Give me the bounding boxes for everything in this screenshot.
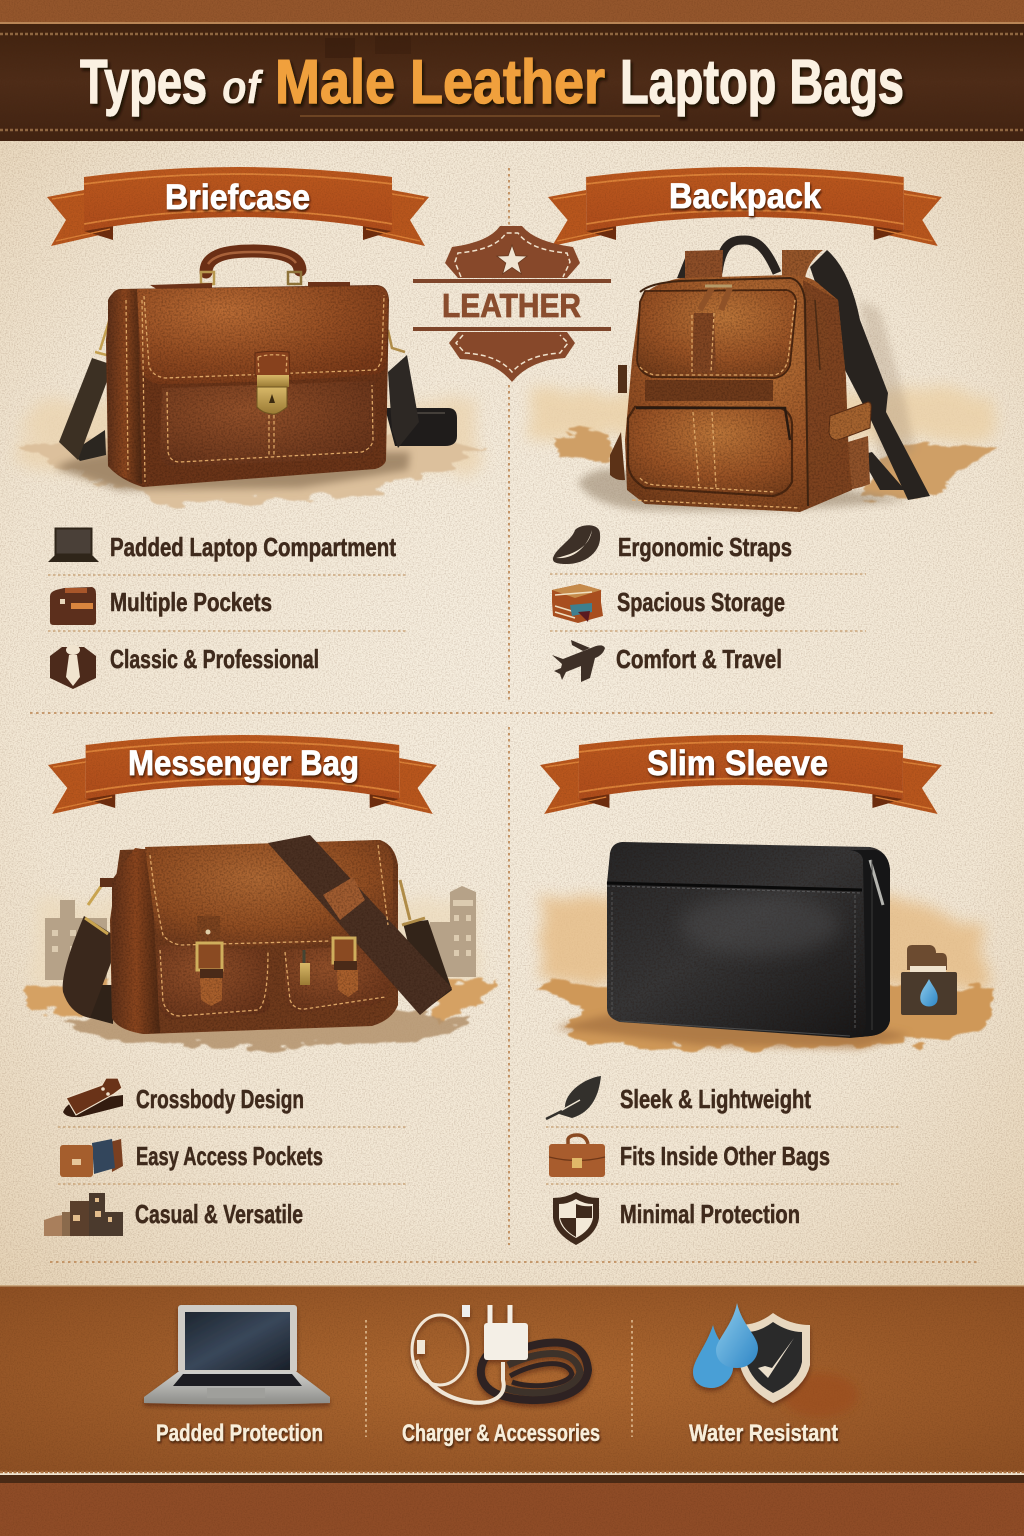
- icon: shield: [553, 1192, 599, 1245]
- messenger feature list: [44, 1078, 406, 1236]
- paper background: [0, 140, 1024, 1286]
- panel: backpack: [525, 167, 995, 682]
- title text: of: [222, 61, 264, 113]
- icon: laptop: [48, 528, 99, 562]
- top leather band: [0, 0, 1024, 24]
- section dividers: [30, 168, 995, 1262]
- icon: shirt and tie: [50, 645, 96, 689]
- charger and cables illustration: [412, 1305, 588, 1403]
- messenger ribbon heading: [48, 735, 437, 814]
- icon: crossbody strap: [63, 1078, 123, 1117]
- water drops and shield illustration: [693, 1303, 810, 1403]
- briefcase feature list: Multiple Pockets: [110, 587, 272, 617]
- icon: easy access pockets: [60, 1139, 123, 1177]
- slim sleeve feature list: [546, 1076, 900, 1245]
- messenger background wash: [22, 886, 495, 1048]
- footer labels: Padded Protection: [156, 1420, 323, 1447]
- leather badge: [413, 226, 611, 382]
- messenger feature list: Crossbody Design: [136, 1084, 304, 1114]
- messenger feature list: Casual & Versatile: [135, 1199, 303, 1229]
- briefcase ribbon heading: Briefcase: [165, 178, 310, 217]
- briefcase background wash: [20, 400, 490, 505]
- icon: airplane: [552, 640, 605, 682]
- messenger bag illustration: [63, 835, 452, 1034]
- backpack background wash: [525, 300, 995, 511]
- panel: messenger bag: [22, 735, 495, 1236]
- backpack feature list: [550, 525, 866, 682]
- backpack feature list: Spacious Storage: [617, 587, 785, 617]
- panel: slim sleeve: [532, 735, 995, 1245]
- icon: water folder: [901, 945, 957, 1015]
- briefcase feature list: [48, 528, 406, 689]
- footer labels: Water Resistant: [689, 1420, 838, 1447]
- briefcase feature list: Padded Laptop Compartment: [110, 532, 396, 562]
- backpack feature list: Comfort & Travel: [616, 644, 782, 674]
- icon: small briefcase: [549, 1135, 605, 1177]
- backpack feature list: Ergonomic Straps: [618, 532, 792, 562]
- panel: briefcase: [20, 167, 490, 689]
- backpack illustration: [610, 240, 930, 512]
- backpack ribbon heading: [548, 167, 942, 246]
- title text: Types: [80, 48, 207, 117]
- slim sleeve illustration: [607, 842, 890, 1038]
- backpack ribbon heading: Backpack: [669, 177, 821, 216]
- leather badge: LEATHER: [442, 287, 581, 324]
- icon: ergonomic strap: [553, 525, 600, 564]
- slim sleeve ribbon heading: [540, 735, 942, 814]
- badge star: [497, 245, 527, 274]
- laptop illustration: [144, 1305, 330, 1404]
- briefcase feature list: Classic & Professional: [110, 644, 319, 674]
- icon: feather: [546, 1076, 601, 1119]
- footer labels: [156, 1420, 838, 1447]
- title text: Laptop Bags: [620, 48, 904, 117]
- icon: spacious storage: [552, 584, 603, 623]
- footer labels: Charger & Accessories: [402, 1420, 600, 1447]
- messenger ribbon heading: Messenger Bag: [128, 744, 359, 783]
- bottom leather band: [0, 1475, 1024, 1536]
- icon: multiple pockets: [50, 587, 96, 625]
- city silhouette: [45, 886, 476, 980]
- slim sleeve feature list: Minimal Protection: [620, 1199, 800, 1229]
- slim sleeve ribbon heading: Slim Sleeve: [647, 744, 828, 783]
- briefcase ribbon heading: [47, 167, 429, 246]
- slim sleeve background wash: [532, 895, 995, 1050]
- messenger feature list: Easy Access Pockets: [136, 1141, 323, 1171]
- title banner: [0, 22, 1024, 141]
- title text: Male Leather: [275, 48, 605, 117]
- briefcase illustration: [59, 251, 457, 487]
- slim sleeve feature list: Sleek & Lightweight: [620, 1084, 811, 1114]
- icon: city blocks: [44, 1193, 123, 1236]
- panel: footer accessories: [0, 1285, 1024, 1472]
- slim sleeve feature list: Fits Inside Other Bags: [620, 1141, 830, 1171]
- title text: [80, 48, 904, 117]
